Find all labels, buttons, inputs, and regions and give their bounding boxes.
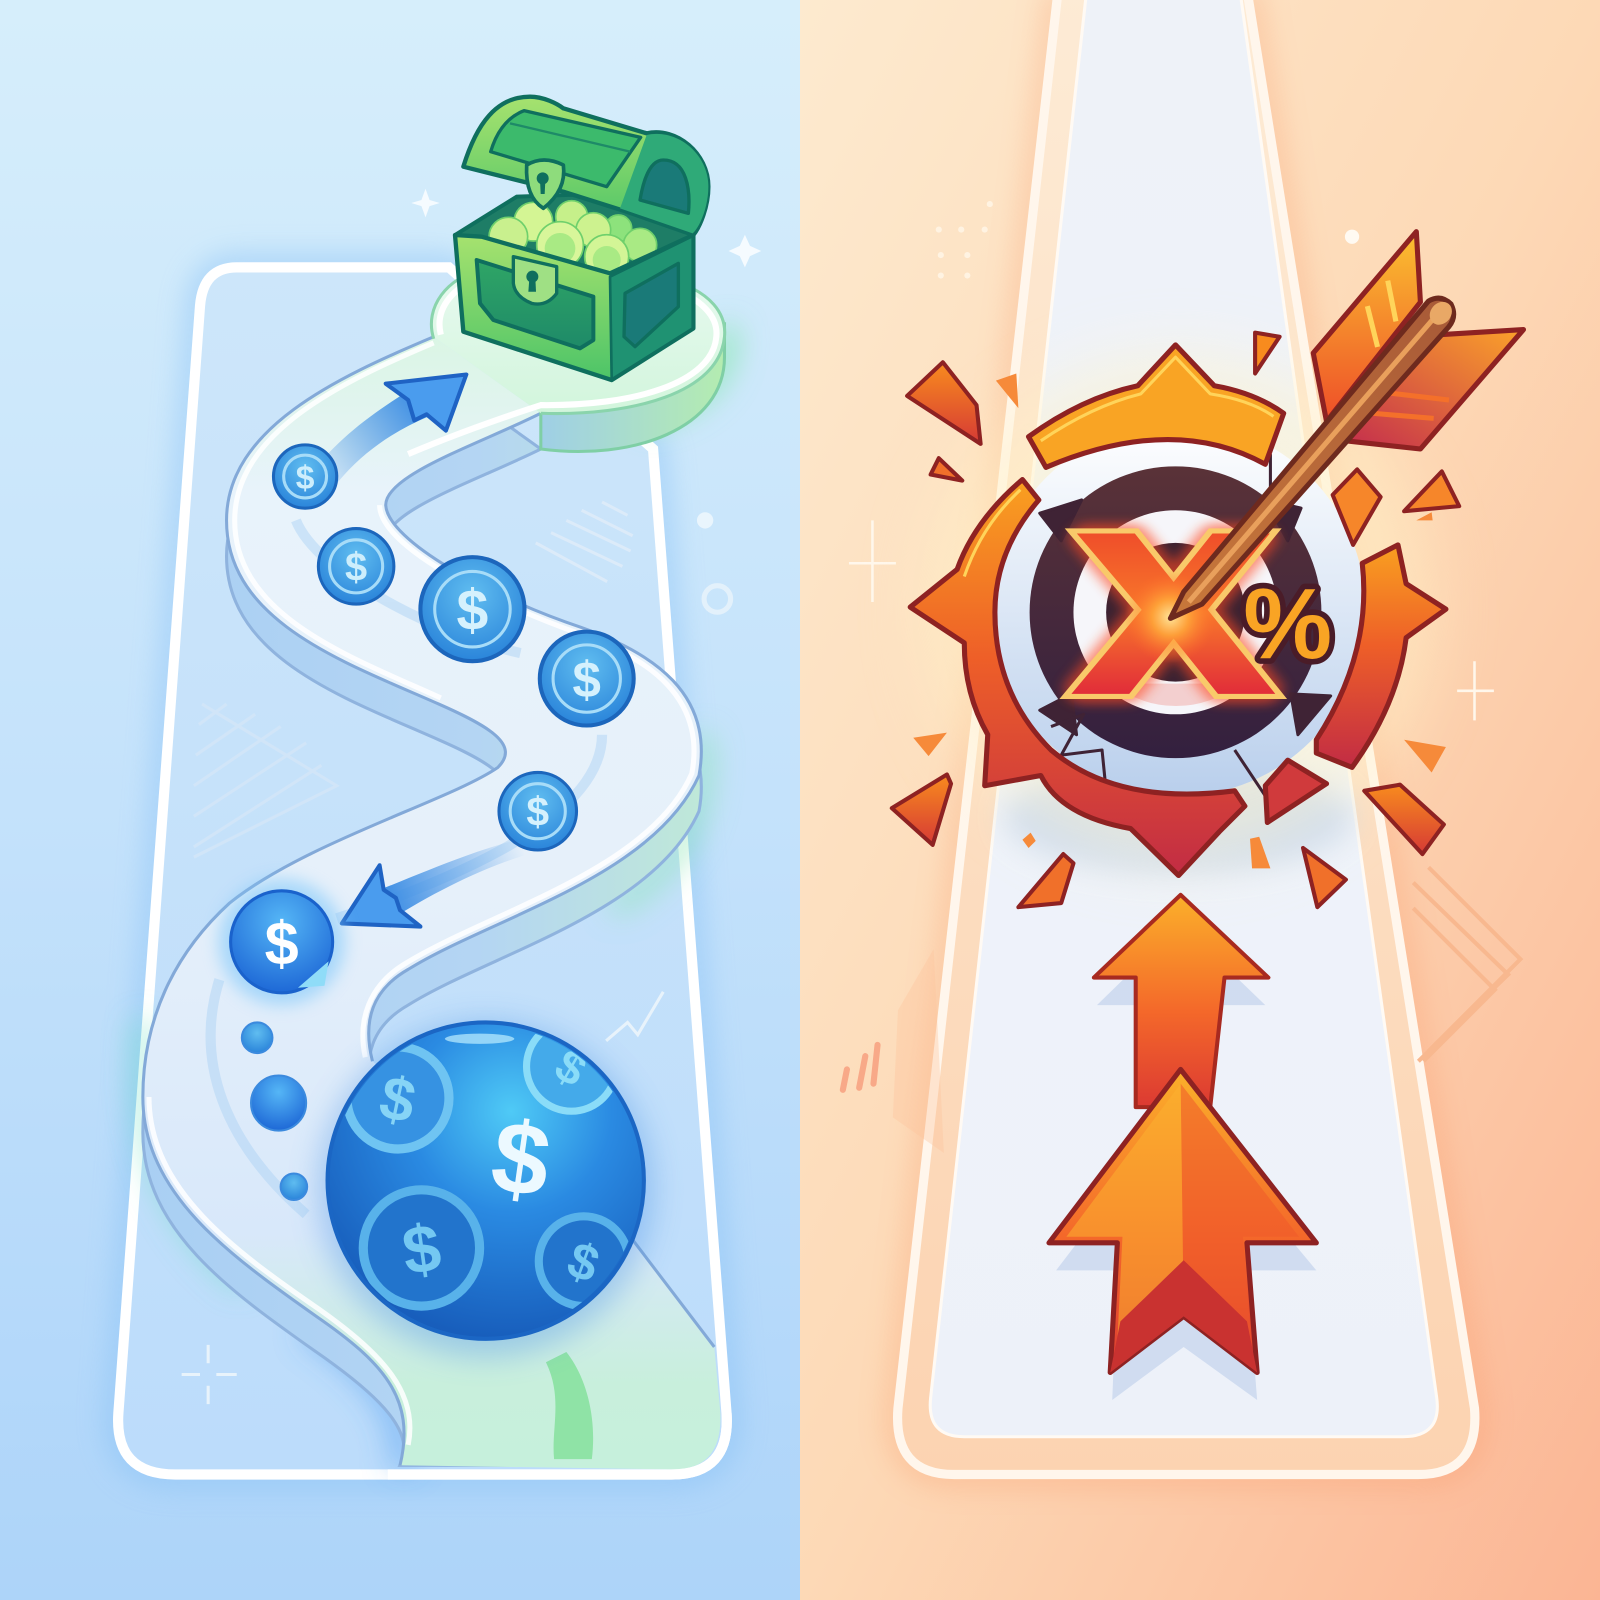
front face [455,235,693,380]
target: shattered bullseye [910,345,1446,876]
platform: chest pedestal [408,270,725,454]
coin 4 [540,632,634,726]
X gold outline: X [1081,491,1266,735]
right ring segment [1316,545,1446,767]
front panel [477,260,593,348]
shaft highlight [1189,318,1434,602]
path: bright ribbon inner edge [149,343,694,1445]
ring highlights [964,357,1273,577]
icon: big money ball [317,1020,654,1357]
panel: winding path scene [118,97,761,1474]
coin 5: $ [526,789,549,835]
decoration: dashes [843,1045,878,1090]
embossed coin top right: $ [546,1038,595,1097]
shadow: below target [1005,760,1352,872]
upper feather [1313,232,1420,421]
frame: rounded left track [118,267,727,1474]
right face [610,236,693,379]
decoration: faint hexagon [893,949,944,1153]
embossed coin lower left [363,1190,480,1306]
path: ribbon outline strokes [143,337,714,1465]
small ball 2 [251,1076,306,1131]
embossed coin lower left: $ [398,1210,445,1290]
top ring segment [1029,345,1284,467]
front hasp [513,257,557,304]
path: winding ribbon top surface [143,337,720,1469]
chest interior [455,193,693,280]
decoration: hatched lines upper right [536,502,633,582]
coin 4: $ [573,651,601,708]
decoration: chevron lines [1413,867,1520,1061]
coin 1 [273,445,337,508]
dark ring [1030,466,1321,758]
embossed coin lower right [539,1216,629,1306]
panel: right background [800,0,1600,1600]
arrow: upper up arrow [1094,895,1268,1107]
white disc [992,422,1365,796]
embossed coin top right [527,1021,616,1111]
lid [463,97,708,235]
path: soft blue trail [211,520,602,1214]
frame: bottom edge over ribbon [388,1413,727,1474]
coin 6: glowing [218,879,345,1005]
shaft end [1425,297,1457,329]
coin 2 [318,529,394,604]
icon: arrow stuck in target [1170,232,1523,618]
decoration: small tick mark [606,992,663,1041]
big X mark: X [1081,491,1266,735]
shaft [1170,298,1454,618]
coin 3 [420,557,524,661]
lower feather [1337,330,1523,449]
shards: flying fragments [892,333,1459,907]
X glow: X [1081,491,1266,735]
lid inner panel [491,111,641,187]
right panel [624,263,678,347]
coin 5 [499,772,577,850]
left and bottom ring segment [910,480,1245,876]
decoration: hatched triangle [194,704,337,857]
path: winding ribbon side wall [143,372,701,1465]
coins in chest [489,201,657,279]
decoration: dots [936,201,1359,279]
small ball 1 [242,1022,272,1053]
panel: straight path scene [843,0,1523,1474]
bottom right ring fragment [1265,760,1327,822]
dark center [1106,543,1245,682]
arrow: lower blue arrow [342,839,526,927]
decoration: sparkles around chest [411,189,761,267]
white inner ring [1073,510,1278,714]
embossed coin lower right: $ [560,1230,606,1294]
arrow: top blue arrow [306,374,466,500]
shards: loose orange flecks [913,373,1446,868]
decoration: plus sparkle [182,1345,237,1404]
small ball 3 [281,1173,307,1200]
lid end window [640,160,689,213]
lid hasp [527,160,564,208]
arrow: lower up arrow [1049,1069,1316,1372]
coin 1: $ [296,460,315,497]
percent sign: % [1243,568,1332,680]
frame: right track [898,0,1475,1474]
impact burst [1124,571,1216,663]
coin 6: glowing: $ [265,909,299,977]
glow: blue and green around ribbon [140,327,728,1469]
ball highlight [445,1034,514,1044]
lower feather stripes [1372,393,1449,418]
coin 2: $ [345,546,367,590]
icon: treasure chest [455,97,708,380]
embossed coin upper left: $ [374,1063,421,1136]
shadow: upward arrows [1056,923,1316,1400]
road: pale straight lane [930,0,1437,1437]
dark ring spikes and cracks [1040,454,1331,816]
target glow [923,354,1434,864]
embossed coin upper left [347,1047,449,1149]
ball dollar sign: $ [485,1099,557,1219]
lid end cap [620,134,708,233]
decoration: dot and ring [697,512,731,612]
upper feather stripes [1367,281,1396,347]
path: green stripe [546,1352,593,1459]
panel: left background [0,0,800,1600]
coin 3: $ [457,579,488,643]
decoration: sparkles [849,520,1494,720]
